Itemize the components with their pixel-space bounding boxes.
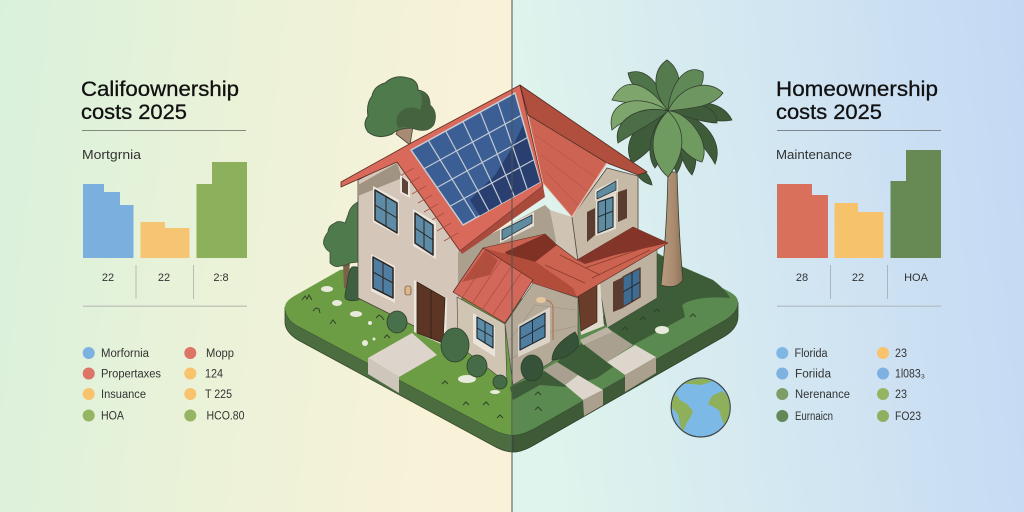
background: right half xyxy=(512,0,1024,512)
gable shaded side xyxy=(550,210,578,260)
left legend: Mopp xyxy=(206,348,234,360)
right legend: 23 xyxy=(895,348,907,360)
grass left xyxy=(285,260,513,435)
house xyxy=(341,85,668,385)
right roof plane xyxy=(528,115,607,217)
wall lamp on stone xyxy=(536,297,553,340)
left title xyxy=(81,78,239,124)
right title: Homeownership xyxy=(776,78,938,101)
right legend: 1l083₃ xyxy=(895,368,925,380)
left side tree xyxy=(324,202,363,301)
porch roof xyxy=(483,227,668,297)
shrubs xyxy=(387,311,579,389)
right chart label: Maintenance xyxy=(776,148,852,162)
wall lamp xyxy=(405,286,411,295)
right legend xyxy=(776,347,925,423)
porch step xyxy=(580,327,612,345)
upper window 2 xyxy=(413,209,436,259)
left title: costs 2025 xyxy=(81,101,187,124)
stone courses xyxy=(510,305,577,360)
clerestory window xyxy=(500,212,534,243)
palm trunk xyxy=(661,172,683,287)
platform side right xyxy=(513,302,738,452)
walkway right 1 xyxy=(543,362,603,416)
porch roof lines xyxy=(545,244,655,283)
right legend: FO23 xyxy=(895,411,921,423)
right bar chart: 28 xyxy=(796,272,808,284)
porch roof shadow band xyxy=(577,227,668,264)
walkway left xyxy=(368,333,437,393)
attic vent xyxy=(400,175,410,198)
left legend: HCO.80 xyxy=(206,410,244,422)
roof valley strip xyxy=(483,248,577,297)
left legend: 124 xyxy=(205,368,224,380)
porch door xyxy=(578,282,604,335)
gable trim xyxy=(572,163,607,217)
lower left window xyxy=(473,313,495,357)
right bar chart: HOA xyxy=(904,272,929,284)
main roof tile strip xyxy=(341,85,543,251)
left title: Califoownership xyxy=(81,78,239,101)
front door xyxy=(414,280,447,346)
palm fronds front xyxy=(611,60,723,177)
right legend: Nerenance xyxy=(795,389,850,401)
tree behind the roof xyxy=(365,77,435,145)
left legend: HOA xyxy=(101,410,124,422)
lower stone wall right xyxy=(598,247,657,328)
grass right xyxy=(513,267,738,435)
hip roof lines xyxy=(462,254,521,316)
icon: globe xyxy=(671,378,732,437)
left legend: Morfornia xyxy=(101,348,150,360)
left bar chart: 2:8 xyxy=(213,272,229,284)
left bar chart: 22 xyxy=(158,272,170,284)
palm fronds back xyxy=(628,103,732,185)
roof tile lines xyxy=(535,135,597,205)
right bar chart xyxy=(777,150,941,299)
gable front wall xyxy=(572,168,638,262)
roof lower eave xyxy=(460,186,545,254)
ground platform xyxy=(285,253,738,452)
hip roof shadow xyxy=(462,250,498,282)
roof ridge strip xyxy=(520,85,647,175)
panel: right costs xyxy=(776,78,941,423)
hip roof xyxy=(453,248,533,323)
walkway right 2 xyxy=(582,330,656,392)
grass shadow between walkways xyxy=(510,343,613,400)
porch window with shutter xyxy=(613,268,640,312)
grass tufts and flowers xyxy=(302,295,696,418)
upper window 1 xyxy=(373,186,399,236)
right bar chart: 22 xyxy=(852,272,864,284)
center divider xyxy=(512,0,513,512)
panel: left costs xyxy=(81,78,247,422)
lower stone wall left xyxy=(457,297,507,383)
solar panel xyxy=(411,93,540,225)
left legend: T 225 xyxy=(205,389,232,401)
gable attic window xyxy=(595,179,618,201)
palm tree xyxy=(611,60,732,287)
lower window xyxy=(371,254,395,303)
stone front window xyxy=(518,307,550,357)
right legend: Florida xyxy=(794,348,828,360)
left chart label: Mortgrnia xyxy=(82,148,141,162)
left bar chart: 22 xyxy=(102,272,114,284)
right legend: 23 xyxy=(895,389,907,401)
background: left half xyxy=(0,0,512,512)
platform side left xyxy=(285,307,513,452)
right title xyxy=(776,78,938,124)
lower stone wall centre xyxy=(505,283,578,385)
left legend xyxy=(83,347,244,422)
gable main window with shutters xyxy=(587,189,627,242)
eave shadow on wall xyxy=(358,163,402,196)
left legend: Propertaxes xyxy=(101,368,161,380)
left bar chart xyxy=(83,162,247,299)
right legend: Eurnaicn xyxy=(795,411,833,423)
right title: costs 2025 xyxy=(776,101,882,124)
left legend: Insuance xyxy=(101,389,146,401)
wall upper section xyxy=(458,205,557,300)
main left wall xyxy=(358,160,462,350)
grass shadow behind walkway xyxy=(600,253,730,345)
right legend: Foriida xyxy=(795,368,832,380)
upper roof shadow xyxy=(505,234,557,262)
